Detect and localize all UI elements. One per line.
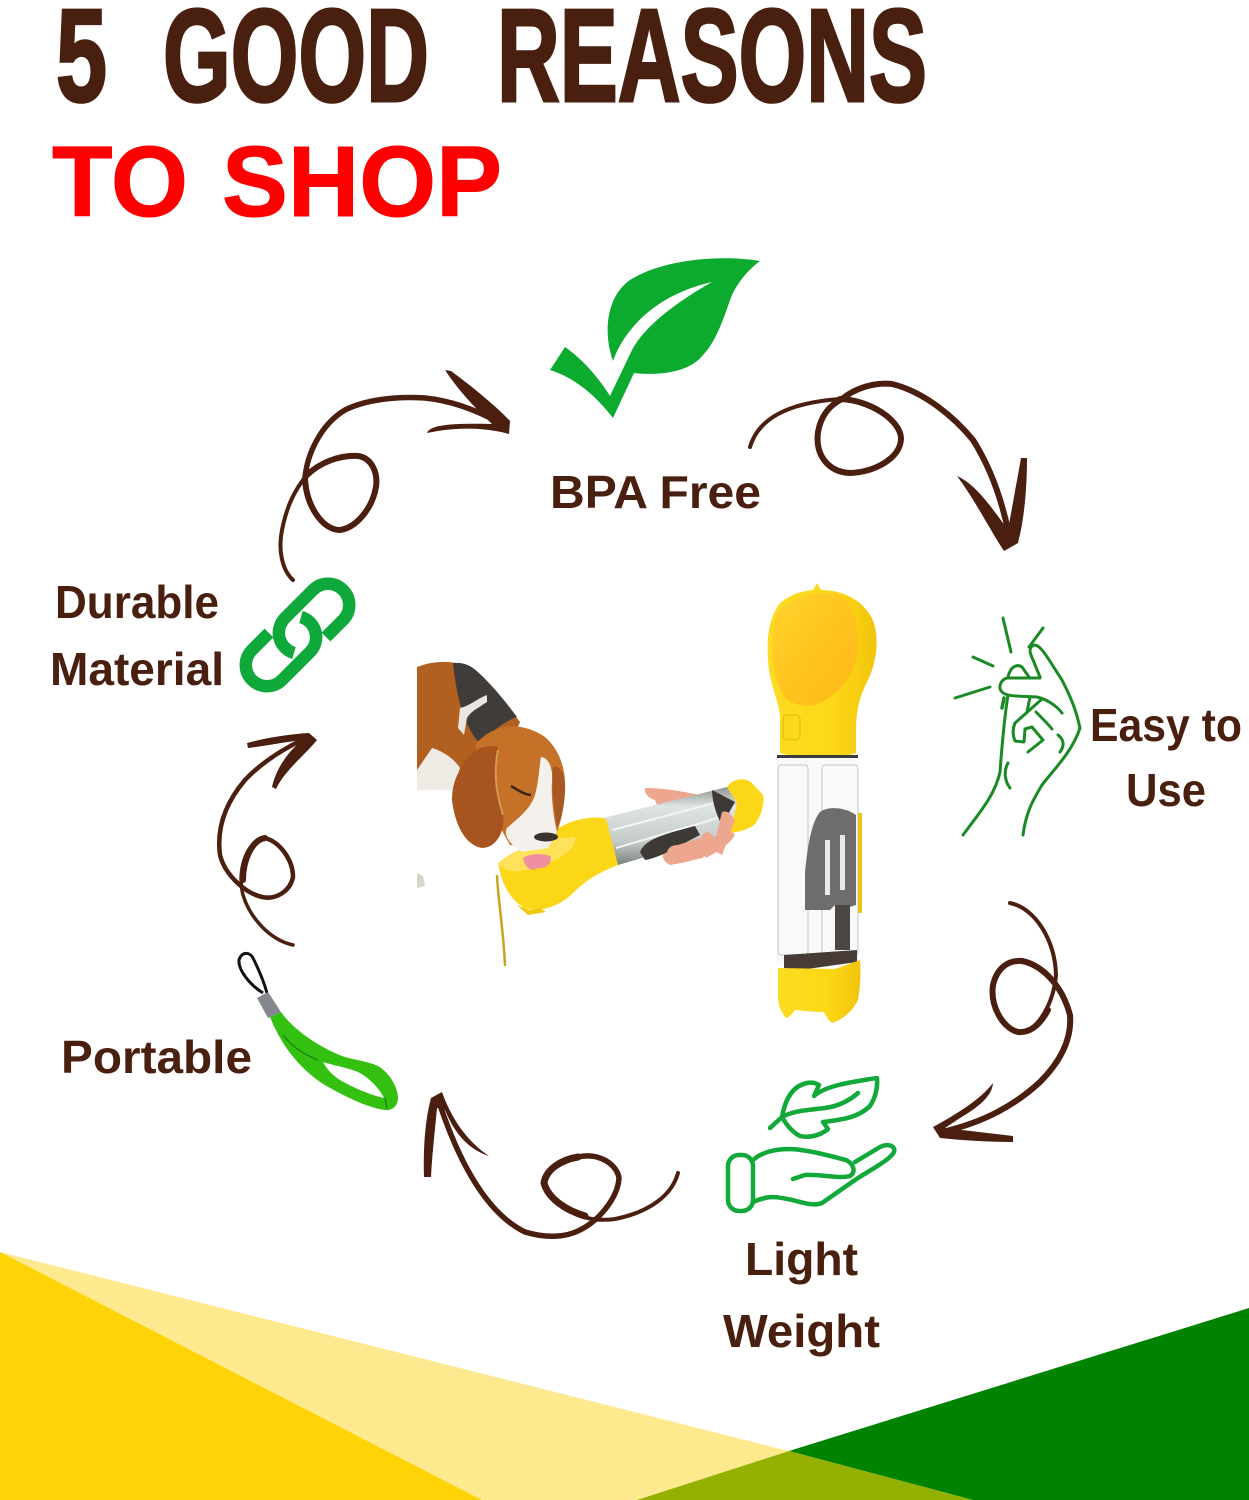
photo: upright bottle	[768, 583, 877, 1023]
background geometric shapes	[0, 1252, 1249, 1500]
tube stripes	[612, 800, 728, 848]
tube chambers	[778, 765, 858, 955]
horizontal tube	[603, 787, 737, 865]
dark base	[784, 950, 857, 970]
label: Durable Material	[50, 576, 224, 695]
yellow cap	[727, 779, 763, 833]
title: TO	[52, 126, 188, 238]
bowl cavity	[772, 593, 858, 706]
label: Light Weight: Light	[745, 1233, 858, 1285]
white muzzle and blaze	[506, 757, 557, 852]
arrow: Portable to Durable Material	[219, 733, 317, 945]
photo: beagle drinking from bottle	[417, 662, 763, 966]
scoop	[805, 808, 856, 910]
lanyard	[497, 875, 505, 966]
scoop cutouts	[825, 835, 845, 895]
dog chest	[417, 748, 460, 790]
right ear	[552, 767, 565, 827]
icon: chain link	[246, 584, 349, 686]
top yellow head	[768, 583, 877, 758]
scoop lower dark	[835, 905, 850, 950]
label: Durable Material: Material	[50, 643, 224, 695]
dog body	[417, 662, 520, 790]
label: Easy to Use	[1090, 699, 1242, 816]
bowl inner	[498, 837, 575, 871]
push button	[783, 715, 800, 740]
dog ear	[452, 746, 504, 848]
bottom yellow base	[778, 960, 860, 1023]
icon: leaf over open hand	[728, 1078, 894, 1211]
title	[52, 0, 927, 238]
arrow: BPA Free to Easy to Use	[750, 384, 1027, 551]
ear highlight	[496, 750, 503, 815]
dog head	[475, 726, 565, 848]
label: Light Weight	[723, 1233, 880, 1357]
label: BPA Free: BPA Free	[550, 466, 761, 518]
hand behind bottle	[645, 788, 735, 865]
arrow: Light Weight to Portable	[424, 1092, 678, 1236]
label: Easy to Use: Easy to	[1090, 699, 1242, 751]
closed eye	[511, 786, 531, 795]
neck shadow	[777, 755, 858, 758]
dog tongue	[523, 854, 551, 870]
label: Light Weight: Weight	[723, 1305, 880, 1357]
tube dark insert	[640, 790, 735, 860]
clear body	[777, 757, 858, 965]
bottle feet	[517, 905, 546, 915]
label: Portable: Portable	[61, 1031, 252, 1083]
horizontal bottle yellow body	[498, 818, 618, 910]
side clip	[858, 813, 862, 913]
dog nose	[534, 832, 558, 842]
icon: finger snap	[955, 618, 1080, 835]
white stripe	[458, 695, 487, 735]
title: SHOP	[222, 126, 502, 238]
arrow: Easy to Use to Light Weight	[933, 903, 1070, 1142]
label: Easy to Use: Use	[1126, 764, 1206, 816]
icon: wrist strap	[239, 953, 398, 1110]
arrow: Durable Material to BPA Free	[280, 370, 510, 580]
dog paw	[417, 873, 425, 888]
dog saddle	[453, 663, 517, 744]
icon: leaf checkmark	[550, 258, 760, 418]
fingers	[667, 812, 735, 864]
label: Durable Material: Durable	[55, 576, 219, 628]
